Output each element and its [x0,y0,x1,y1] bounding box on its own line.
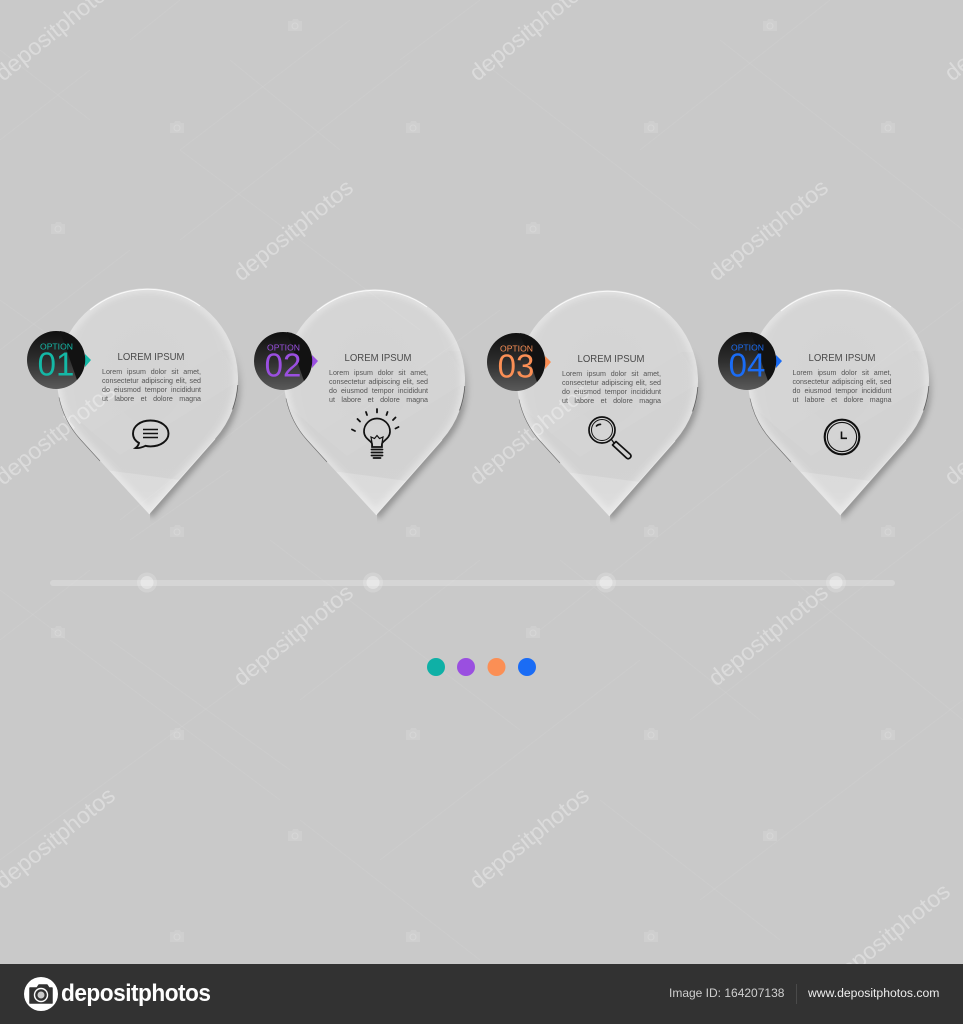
option badge: 02 [265,346,301,384]
icon: light bulb [352,409,398,458]
option badge: OPTION [731,342,763,352]
option badge [487,333,551,391]
text block: do eiusmod tempor incididunt [792,387,892,395]
text block: consectetur adipiscing elit, sed [329,378,428,386]
image id: Image ID: 164207138 [669,986,784,1000]
text block: ut labore et dolore magna [792,396,892,404]
option badge: OPTION [40,342,73,352]
panel: option 3 [487,290,703,521]
glass pin shape [746,289,932,519]
text block [102,368,201,403]
text block: do eiusmod tempor incididunt [562,388,661,396]
text block: do eiusmod tempor incididunt [329,387,428,395]
colour legend dots [427,658,536,676]
background watermark pattern: depositphotos [464,782,594,894]
background watermark pattern: depositphotos [228,174,358,286]
glass pin shape [283,289,468,519]
background watermark pattern: depositphotos [464,378,594,490]
logo wordmark: depositphotos [61,980,211,1007]
option badge: 01 [38,346,74,382]
option badge: OPTION [500,344,533,354]
icon: magnifying glass [589,417,631,459]
text block: Lorem ipsum dolor sit amet, [102,368,201,376]
text block: Lorem ipsum dolor sit amet, [329,369,428,377]
website url: www.depositphotos.com [808,986,939,1000]
icon: speech bubble [133,420,168,448]
background watermark pattern: depositphotos [703,174,833,286]
glass pin shape [516,290,701,520]
heading: LOREM IPSUM [808,353,875,364]
background watermark pattern: depositphotos [703,579,833,691]
text block: consectetur adipiscing elit, sed [562,379,661,387]
option badge [718,332,782,390]
option badge [254,332,318,390]
timeline [50,572,895,592]
text block: ut labore et dolore magna [562,397,661,405]
text block: consectetur adipiscing elit, sed [102,377,201,385]
text block [562,370,661,405]
text block: ut labore et dolore magna [102,395,201,403]
option badge [27,331,91,389]
option badge: 03 [498,348,534,384]
heading: LOREM IPSUM [578,354,644,365]
icon: camera logo [24,977,58,1011]
text block: do eiusmod tempor incididunt [102,386,201,394]
heading: LOREM IPSUM [345,353,411,364]
text block [792,369,892,404]
heading: LOREM IPSUM [118,352,184,363]
footer bar [0,964,963,1024]
option badge: 04 [728,346,765,384]
text block: consectetur adipiscing elit, sed [792,378,892,386]
panel: option 2 [254,289,470,520]
text block: Lorem ipsum dolor sit amet, [792,369,892,377]
option badge: OPTION [267,342,300,352]
text block [329,369,428,404]
text block: ut labore et dolore magna [329,396,428,404]
background watermark pattern: depositphotos [228,579,358,691]
text block: Lorem ipsum dolor sit amet, [562,370,661,378]
panel: option 4 [718,289,934,520]
icon: clock [824,420,859,454]
glass pin shape [56,288,241,518]
panel: option 1 [27,288,243,519]
